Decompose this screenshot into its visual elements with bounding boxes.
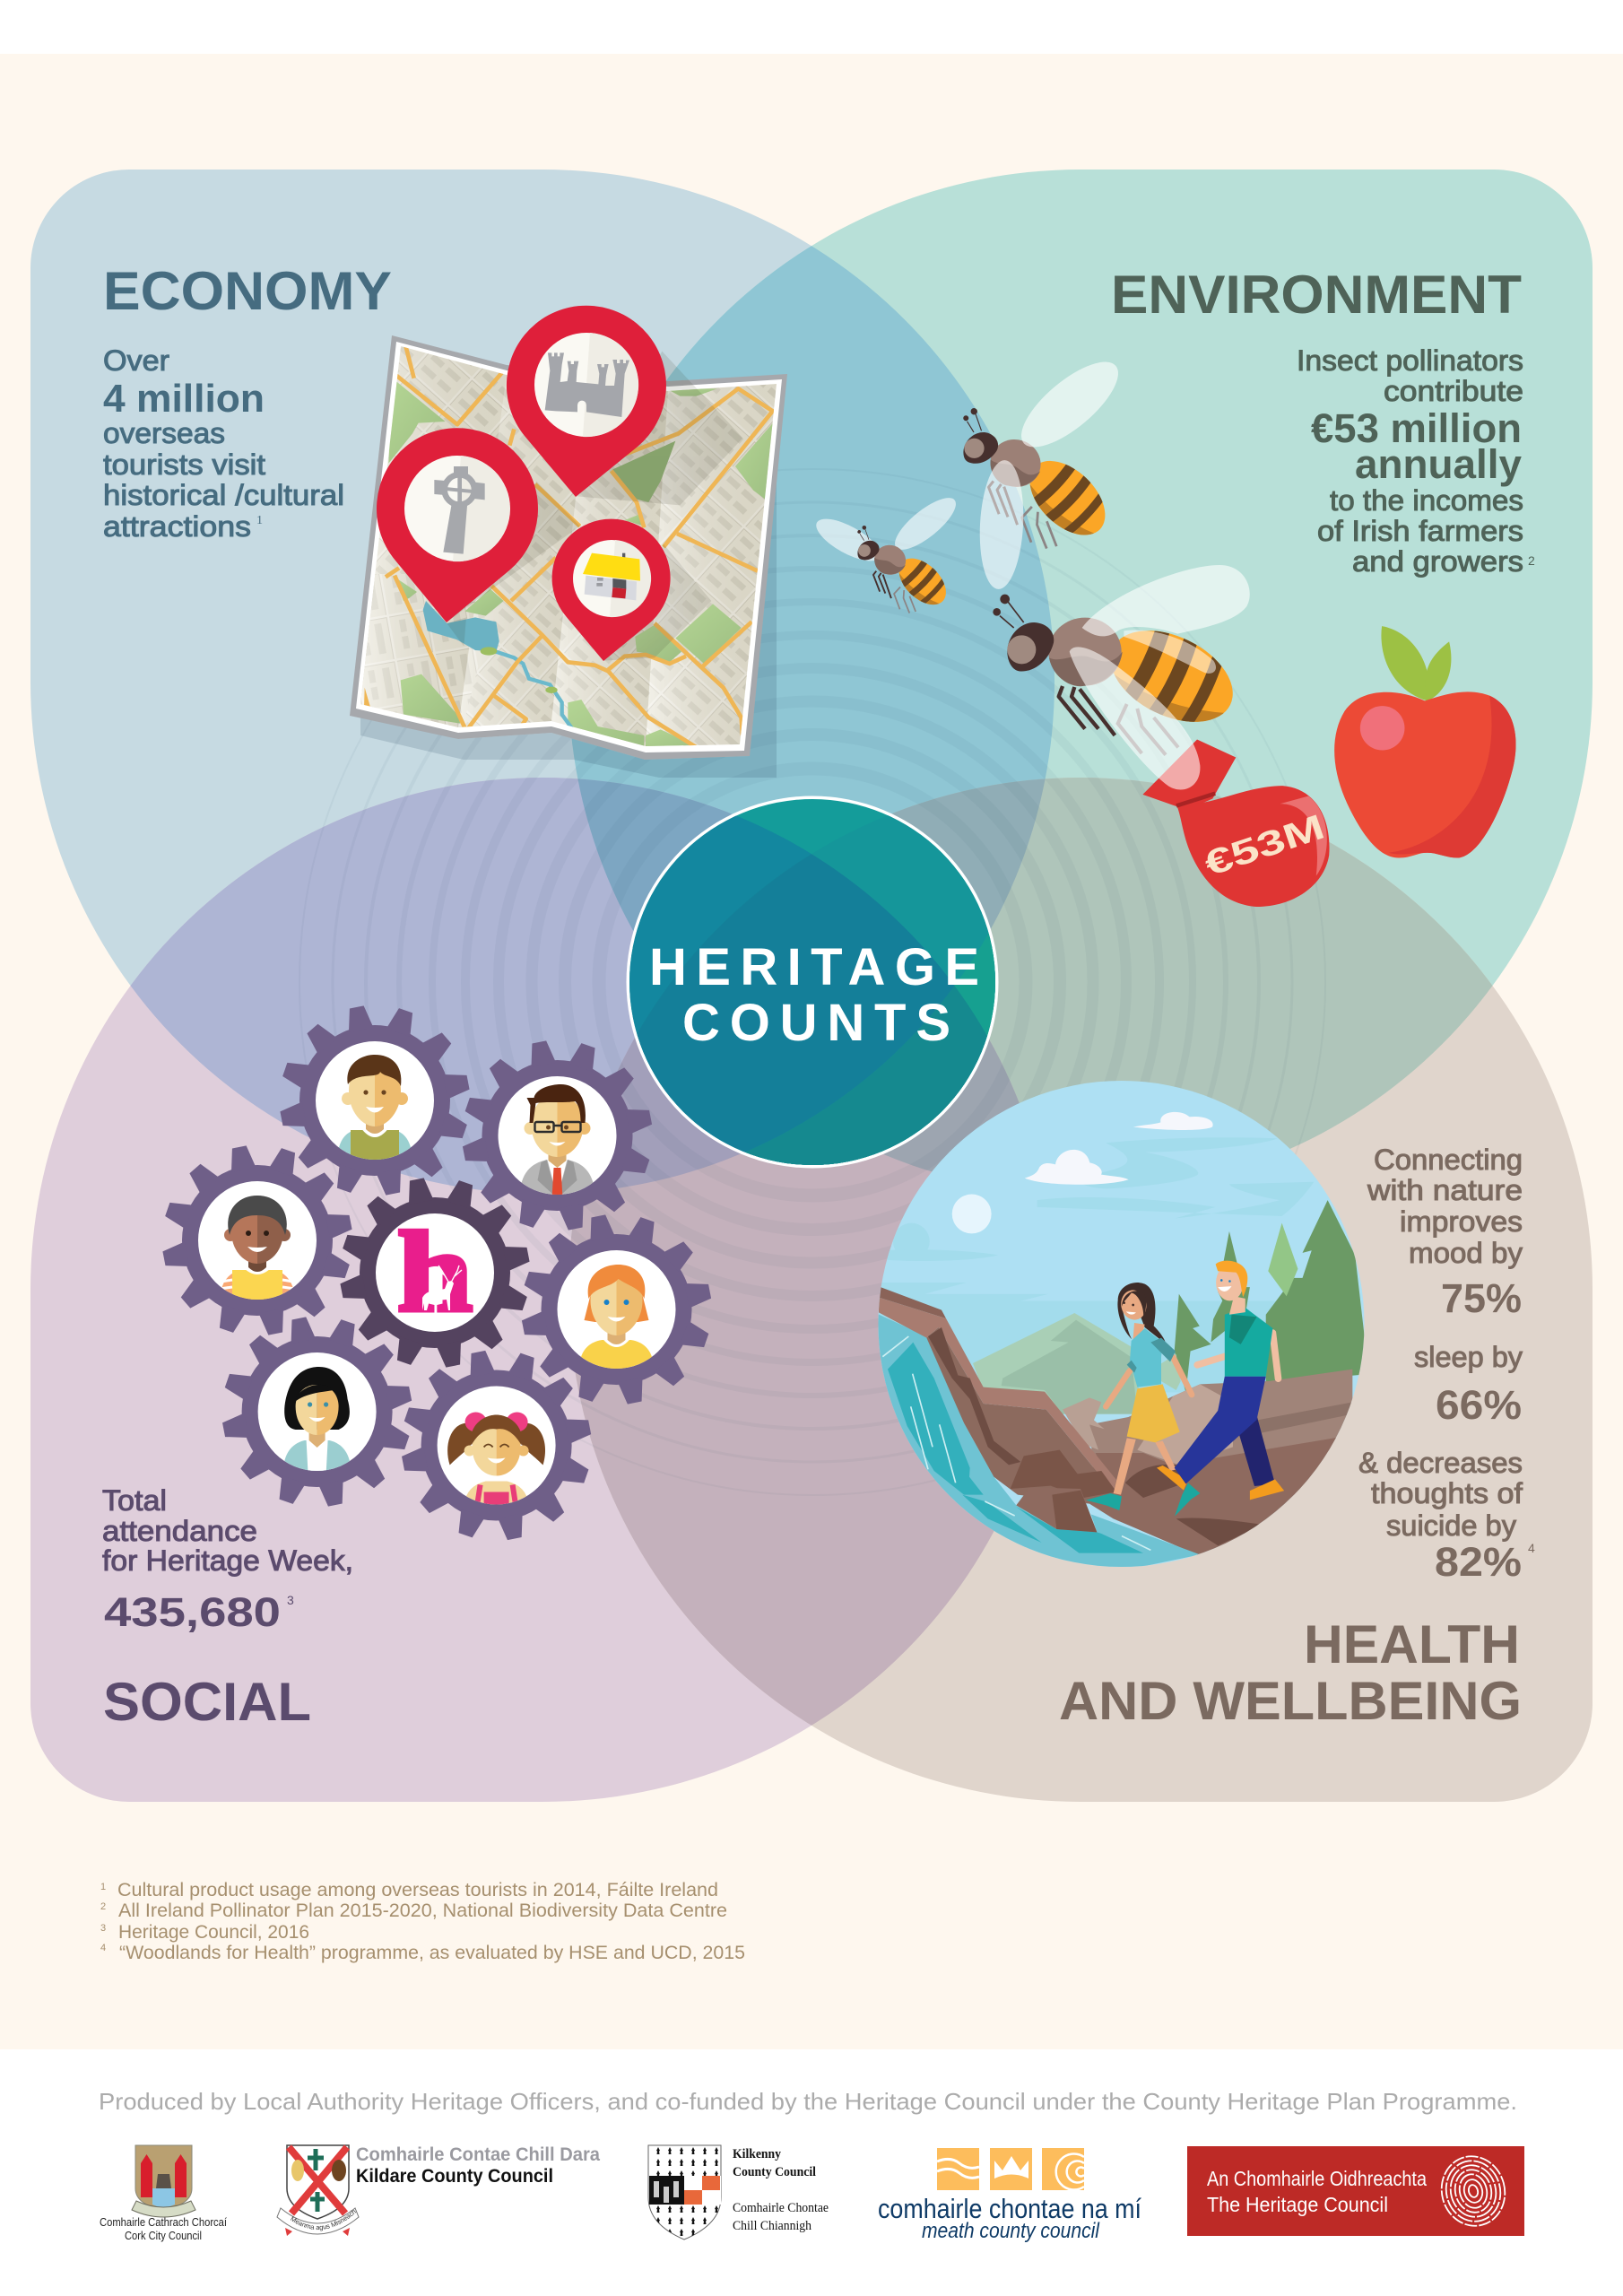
gear: woman with black hair [222, 1317, 412, 1507]
boulder [1016, 1487, 1097, 1532]
gear: heritage logo [324, 1161, 546, 1384]
logo: Kildare County Council [276, 2144, 601, 2236]
logo: Kilkenny County Council: County Council [733, 2165, 816, 2179]
map main roads [386, 347, 773, 747]
environment heading: ENVIRONMENT [1111, 265, 1522, 325]
gear: girl with pigtails [402, 1351, 592, 1541]
logo: Meath County Council [878, 2148, 1141, 2243]
footnotes: 1 [100, 1882, 106, 1892]
health statistic text: 4 [1528, 1541, 1535, 1555]
environment statistic text: and growers [1352, 545, 1523, 578]
environment statistic text [1297, 344, 1535, 578]
waterfall [868, 1312, 1200, 1572]
logo: Kilkenny County Council: Kilkenny [733, 2147, 781, 2161]
footnotes: “Woodlands for Health” programme, as evaluated by HSE and UCD, 2015 [119, 1943, 745, 1963]
economy statistic text: 1 [256, 514, 263, 527]
crest: Cork [132, 2145, 195, 2217]
logo: Meath County Council: comhairle chontae na mí [878, 2193, 1141, 2224]
health statistic text: sleep by [1414, 1341, 1523, 1373]
icon: white stag [422, 1265, 462, 1310]
bee: small [811, 490, 965, 624]
sky streaks [875, 1137, 1314, 1392]
money bag [1142, 739, 1330, 907]
gear: boy with dark hair [163, 1145, 352, 1335]
logo: Cork City Council [100, 2145, 227, 2242]
panel: social shape [30, 778, 1055, 1802]
crest: Kildare: Meanma agus Misneach [291, 2210, 357, 2231]
venn diagram: four overlapping panels [30, 170, 1593, 1802]
icon: cottage [583, 553, 640, 600]
man walking [1175, 1261, 1284, 1500]
environment statistic text: to the incomes [1330, 484, 1523, 517]
panel: health and wellbeing shape [568, 778, 1593, 1802]
social statistic text: for Heritage Week, [102, 1544, 353, 1577]
gear: boy [280, 1006, 470, 1196]
health statistic text: thoughts of [1371, 1477, 1523, 1509]
panel: economy shape [30, 170, 1055, 1194]
environment statistic text: 2 [1528, 553, 1535, 568]
footnotes: Heritage Council, 2016 [118, 1922, 309, 1943]
icon: celtic cross [434, 466, 485, 554]
health and wellbeing heading: AND WELLBEING [1059, 1671, 1522, 1731]
footnotes: Cultural product usage among overseas tourists in 2014, Fáilte Ireland [117, 1880, 718, 1900]
illustration: couple walking in nature [868, 1076, 1374, 1585]
footnotes: 2 [100, 1901, 106, 1912]
crest: Kildare [276, 2144, 359, 2236]
health statistic text: with nature [1367, 1174, 1523, 1206]
logo: The Heritage Council: An Chomhairle Oidhreachta [1207, 2167, 1427, 2190]
environment statistic text: of Irish farmers [1317, 515, 1523, 547]
economy statistic text [103, 344, 344, 543]
social statistic text: attendance [102, 1515, 257, 1547]
economy statistic text: Over [103, 344, 169, 377]
health statistic text [1358, 1144, 1535, 1585]
economy statistic text: overseas [103, 417, 225, 449]
social statistic text: Total [102, 1484, 167, 1517]
logo: Kildare County Council: Kildare County Council [356, 2166, 553, 2187]
pin shadows [447, 352, 742, 661]
sun [952, 1195, 992, 1233]
logo: Kilkenny County Council [648, 2145, 829, 2239]
woman walking [1086, 1283, 1200, 1517]
map parks [388, 381, 774, 751]
footnotes: 3 [100, 1923, 106, 1934]
panel: environment shape [568, 170, 1593, 1194]
credit line: Produced by Local Authority Heritage Officers, and co-funded by the Heritage Council under the County Heritage Plan Programme. [99, 2088, 1517, 2115]
overlap regions [30, 170, 1593, 1802]
logo: Meath County Council: meath county council [922, 2219, 1100, 2243]
cliff [879, 1287, 1116, 1504]
pin: castle [507, 306, 666, 497]
title: HERITAGE [649, 938, 979, 996]
logo: The Heritage Council: The Heritage Council [1207, 2193, 1388, 2216]
centre circle [626, 796, 999, 1168]
map illustration with pins [350, 306, 789, 778]
environment statistic text: Insect pollinators [1297, 344, 1523, 377]
health statistic text: mood by [1409, 1237, 1523, 1269]
pin: celtic cross [377, 428, 538, 622]
concentric rings [299, 469, 1325, 1495]
pine trees [1175, 1200, 1369, 1392]
gear: woman with red hair [522, 1214, 711, 1405]
health statistic text: suicide by [1386, 1509, 1516, 1542]
apple [1334, 626, 1516, 857]
health and wellbeing heading [1059, 1614, 1522, 1731]
clouds [1025, 1112, 1213, 1185]
title: COUNTS [682, 994, 950, 1052]
environment statistic text: annually [1355, 441, 1522, 487]
logo: heritage h: h [397, 1208, 473, 1335]
mountains [973, 1313, 1143, 1414]
label: €53M: €53M [1200, 808, 1330, 884]
health statistic text: 66% [1436, 1382, 1522, 1428]
logo: Kildare County Council: Comhairle Contae Chill Dara [356, 2144, 600, 2165]
social statistic text: 435,680 [104, 1589, 281, 1635]
bee: medium [933, 348, 1136, 590]
crest: Kilkenny [648, 2145, 721, 2239]
social statistic text: 3 [287, 1593, 294, 1607]
environment statistic text: contribute [1384, 375, 1523, 407]
gears with people [146, 989, 728, 1557]
logo: The Heritage Council [1187, 2146, 1524, 2236]
health statistic text: 75% [1441, 1275, 1522, 1321]
footnotes: 4 [100, 1943, 106, 1953]
environment statistic text: €53 million [1311, 405, 1522, 451]
icon squares [937, 2148, 1084, 2190]
economy statistic text: 4 million [103, 377, 265, 421]
footnotes [100, 1880, 745, 1963]
icon: castle [545, 352, 629, 417]
icon: fingerprint [1434, 2149, 1513, 2233]
economy statistic text: tourists visit [103, 448, 265, 481]
logo: Kilkenny County Council: Comhairle Chontae [733, 2201, 829, 2215]
health statistic text: & decreases [1358, 1447, 1523, 1479]
ground and rocks [1063, 1369, 1352, 1555]
fold panels [360, 346, 507, 727]
social statistic text [102, 1484, 353, 1635]
folded map [350, 332, 789, 762]
health statistic text: 82% [1435, 1539, 1522, 1585]
footnotes: All Ireland Pollinator Plan 2015-2020, National Biodiversity Data Centre [118, 1900, 727, 1921]
health statistic text: improves [1400, 1205, 1523, 1238]
health and wellbeing heading: HEALTH [1304, 1614, 1520, 1674]
social heading: SOCIAL [103, 1672, 311, 1732]
pin: cottage [552, 519, 671, 661]
title [649, 938, 979, 1052]
logo: Cork City Council: Cork City Council [125, 2229, 202, 2242]
economy heading: ECONOMY [103, 261, 392, 321]
map lake and river [423, 601, 574, 731]
economy statistic text: historical /cultural [103, 479, 344, 511]
logo: Cork City Council: Comhairle Cathrach Chorcaí [100, 2215, 227, 2229]
map shadow [360, 422, 777, 778]
bee: large [993, 565, 1250, 790]
gear: man with glasses [463, 1040, 652, 1231]
economy statistic text: attractions [103, 510, 251, 543]
health statistic text: Connecting [1374, 1144, 1523, 1176]
logo: Kilkenny County Council: Chill Chiannigh [733, 2219, 812, 2233]
